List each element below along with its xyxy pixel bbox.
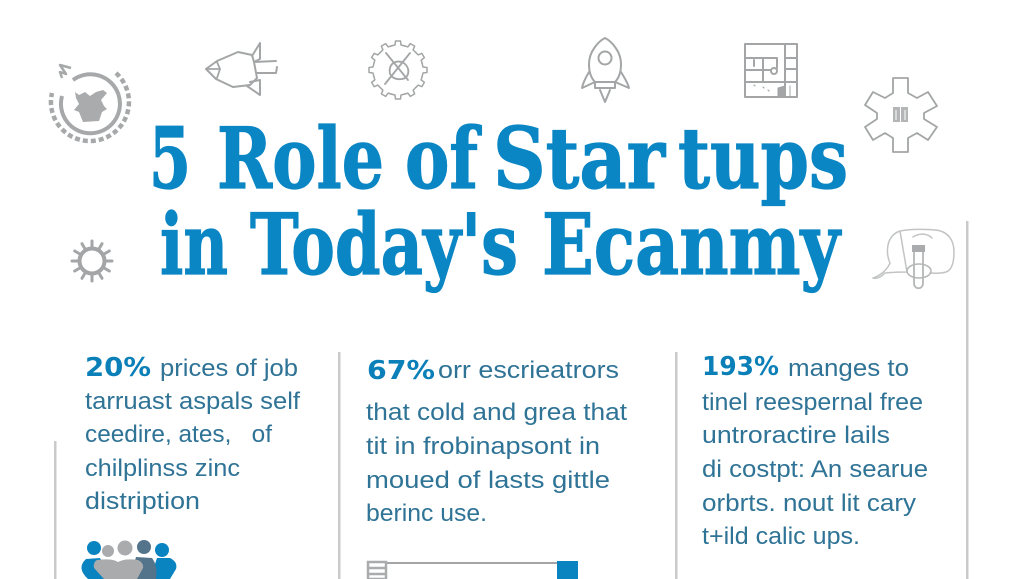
text block: column three <box>702 352 928 550</box>
title: tups <box>678 109 848 208</box>
text block: column one: chilplinss zinc <box>85 455 240 482</box>
icon: small sun gear <box>72 241 112 281</box>
title: Today's <box>250 195 518 294</box>
title: in <box>160 195 228 294</box>
icon: hexagonal gear <box>865 78 937 152</box>
icon: circular target badge <box>51 65 129 141</box>
text block: column two: orr escrieatrors <box>438 357 619 384</box>
text block: column two: that cold and grea that <box>366 399 627 426</box>
bar chart: axis with gray and blue bars <box>368 561 578 579</box>
icon: rocket sideways <box>206 43 277 95</box>
icon: rocket upright <box>582 38 629 102</box>
icon: speech bubble with tube <box>873 229 954 288</box>
text block: column two <box>366 356 627 527</box>
title: 5 <box>149 109 191 208</box>
title: of <box>405 109 482 208</box>
text block: column three: di costpt: An searue <box>702 456 928 483</box>
column divider: right <box>966 221 968 579</box>
text block: column one: tarruast aspals self <box>85 388 300 415</box>
text block: column one: distription <box>85 488 200 515</box>
title: Star <box>493 109 667 208</box>
title: Ecanmy <box>542 195 842 294</box>
text block: column three: tinel reespernal free <box>702 389 923 416</box>
text block: column two: 67% <box>367 356 435 386</box>
text block: column three: untroractire lails <box>702 422 890 449</box>
title <box>149 109 848 294</box>
text block: column one: 20% <box>85 353 151 383</box>
text block: column three: orbrts. nout lit cary <box>702 490 916 517</box>
column divider: second <box>338 352 340 579</box>
text block: column one: ceedire, ates, of <box>85 421 272 448</box>
column divider: third <box>675 352 678 579</box>
text block: column three: t+ild calic ups. <box>702 523 860 550</box>
icon: gear with crossed circle <box>369 41 427 99</box>
text block: column three: manges to <box>788 355 909 382</box>
text block: column one <box>85 353 300 515</box>
text block: column two: moued of lasts gittle <box>366 467 610 494</box>
text block: column two: tit in frobinapsont in <box>366 433 600 460</box>
text block: column three: 193% <box>702 352 779 382</box>
text block: column one: prices of job <box>160 355 298 382</box>
icon: group of people <box>81 540 176 579</box>
title: Role <box>217 109 384 208</box>
column divider: left <box>54 441 56 579</box>
icon: maze floor plan <box>745 44 797 97</box>
text block: column two: berinc use. <box>366 500 487 527</box>
